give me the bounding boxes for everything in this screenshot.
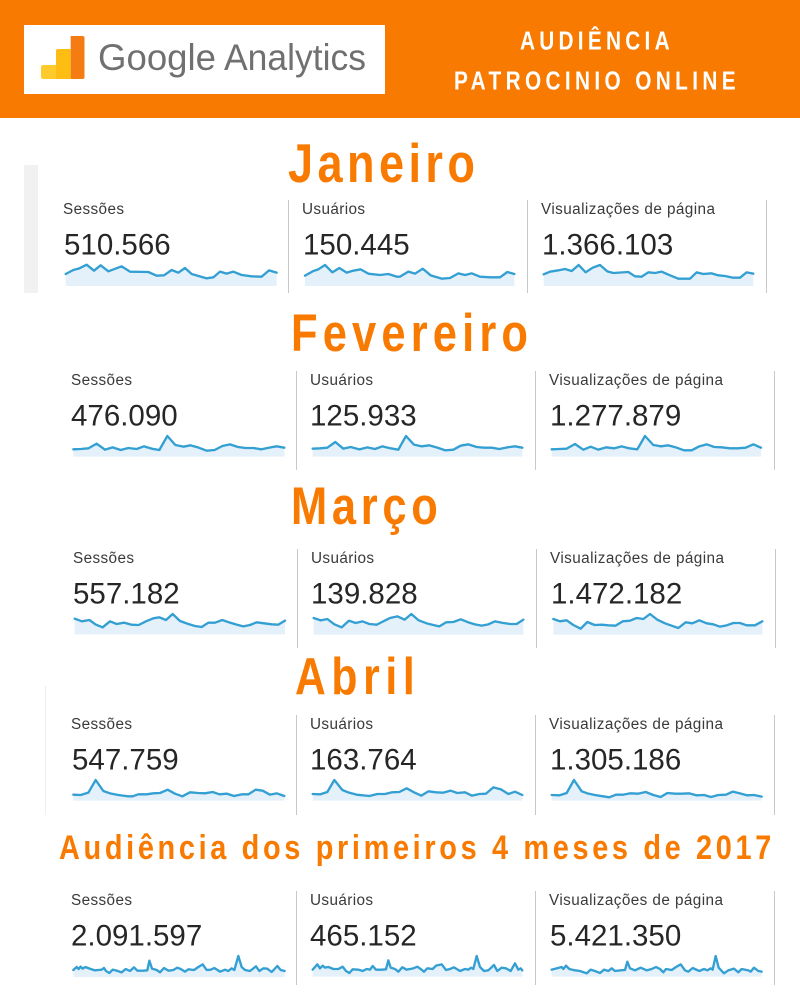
metric: Usuários [310, 372, 522, 457]
metric: Usuários [310, 716, 522, 801]
panel: Abril metrics [71, 715, 774, 815]
metric: Visualizações de página: 1.305.186 [550, 744, 681, 776]
decorative thin line [44, 686, 46, 815]
metric: Visualizações de página: 1.277.879 [550, 400, 681, 432]
metric: Sessões [63, 201, 277, 286]
metric: Sessões: Sessões [63, 201, 124, 218]
panel: Março metrics [73, 549, 776, 648]
metric: Sessões [71, 372, 284, 457]
metric: Sessões: Sessões [71, 716, 132, 733]
metric: Sessões: 510.566 [64, 228, 171, 262]
metric: Visualizações de página: 1.366.103 [542, 228, 673, 262]
metric: Usuários: Usuários [310, 372, 373, 389]
metric: Visualizações de página: 1.472.182 [551, 578, 682, 610]
metric: Usuários [302, 201, 514, 286]
metric: Sessões [71, 716, 284, 801]
metric: Usuários: Usuários [310, 892, 373, 909]
metric: Usuários: 465.152 [310, 920, 417, 952]
header title: PATROCINIO ONLINE [454, 66, 736, 95]
metric: Visualizações de página [541, 201, 753, 286]
logo wordmark [98, 37, 366, 78]
metric: Sessões: 2.091.597 [71, 920, 202, 952]
metric: Visualizações de página [550, 550, 762, 635]
heading: Audiência dos primeiros 4 meses de 2017: Audiência dos primeiros 4 meses de 2017 [59, 828, 771, 867]
metric: Usuários: 150.445 [303, 228, 410, 262]
metric: Usuários: 163.764 [310, 744, 417, 776]
logo wordmark: Analytics [224, 37, 366, 78]
metric: Usuários: Usuários [311, 550, 374, 567]
panel: Janeiro metrics [63, 200, 766, 293]
heading: Janeiro: Janeiro [288, 132, 475, 194]
logo panel: Google Analytics [24, 25, 385, 94]
metric: Usuários: Usuários [310, 716, 373, 733]
metric: Usuários: Usuários [302, 201, 365, 218]
heading: Março: Março [291, 477, 438, 536]
metric: Sessões: 476.090 [71, 400, 178, 432]
metric: Usuários: 125.933 [310, 400, 417, 432]
metric: Visualizações de página: Visualizações de página [541, 201, 715, 218]
metric: Usuários [311, 550, 523, 635]
metric: Sessões: 557.182 [73, 578, 180, 610]
panel: total metrics [71, 891, 774, 985]
metric: Sessões [73, 550, 285, 634]
metric: Usuários [310, 892, 522, 977]
logo wordmark: Google [98, 37, 216, 78]
heading: Abril: Abril [295, 648, 415, 706]
metric: Visualizações de página: Visualizações de página [550, 550, 724, 567]
metric: Sessões: Sessões [71, 372, 132, 389]
metric: Sessões: 547.759 [72, 744, 179, 776]
metric: Visualizações de página [549, 372, 761, 457]
heading: Fevereiro: Fevereiro [291, 304, 528, 363]
header title [454, 25, 736, 95]
metric: Sessões: Sessões [73, 550, 134, 567]
header title: AUDIÊNCIA [520, 25, 670, 55]
metric: Visualizações de página [549, 892, 762, 977]
panel: Fevereiro metrics [71, 371, 774, 470]
metric: Visualizações de página: Visualizações de página [549, 892, 723, 909]
metric: Visualizações de página: Visualizações de página [549, 372, 723, 389]
metric: Usuários: 139.828 [311, 578, 418, 610]
metric: Visualizações de página [549, 716, 762, 801]
header banner [0, 0, 800, 118]
icon: analytics bars [41, 36, 84, 79]
decorative side bar [24, 165, 38, 293]
metric: Sessões [71, 892, 285, 977]
metric: Visualizações de página: 5.421.350 [550, 920, 681, 952]
metric: Sessões: Sessões [71, 892, 132, 909]
metric: Visualizações de página: Visualizações de página [549, 716, 723, 733]
